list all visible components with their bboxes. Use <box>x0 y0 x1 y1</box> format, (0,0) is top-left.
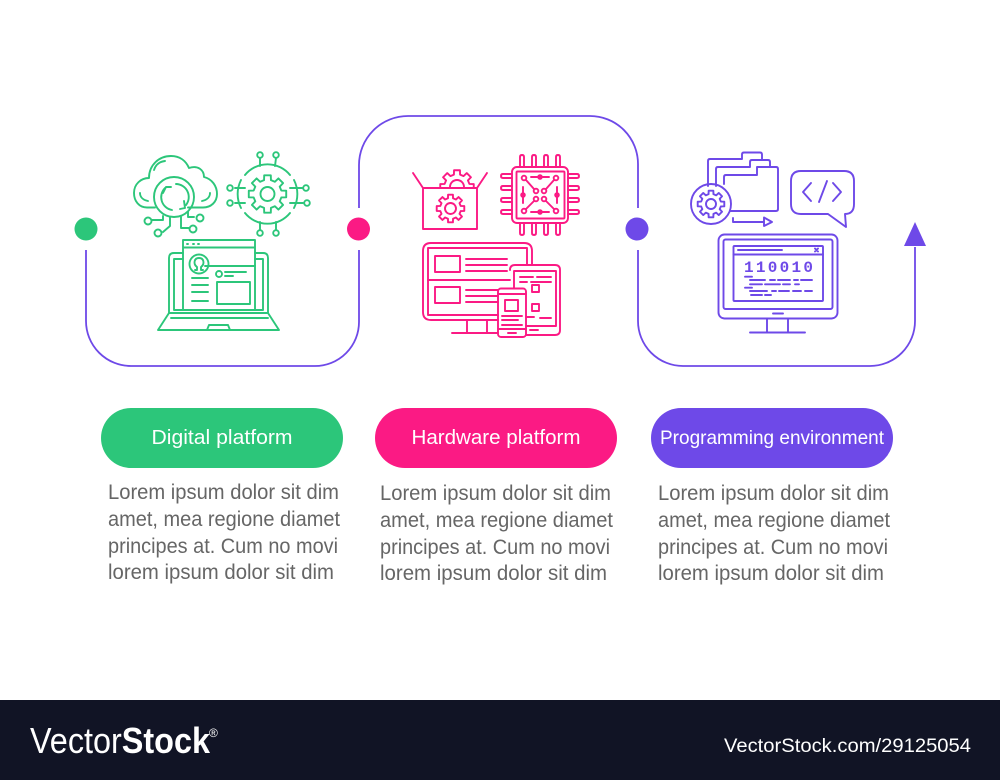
registered mark: ® <box>209 726 218 740</box>
text block: programming environment description: Lorem ipsum dolor sit dim <box>658 482 889 505</box>
text block: hardware platform description: principes at. Cum no movi <box>380 536 610 559</box>
text block: hardware platform description: Lorem ipsum dolor sit dim <box>380 482 611 505</box>
icon: folders with gear <box>691 152 778 226</box>
text block: digital platform description: Lorem ipsum dolor sit dim <box>108 481 339 504</box>
text block: hardware platform description: lorem ipsum dolor sit dim <box>380 562 607 585</box>
icon: cloud sync <box>134 156 217 236</box>
text block: digital platform description: amet, mea regione diamet <box>108 508 340 531</box>
timeline dot: green <box>74 218 98 240</box>
icon: gear circuit <box>227 152 310 236</box>
footer logo: VectorStock <box>30 720 211 761</box>
footer image id: VectorStock.com/29125054 <box>724 736 971 757</box>
timeline connector line <box>86 116 915 366</box>
label pill: programming environment <box>651 408 893 468</box>
text block: hardware platform description <box>380 482 613 585</box>
text block: programming environment description: amet, mea regione diamet <box>658 509 890 532</box>
text block: programming environment description: lorem ipsum dolor sit dim <box>658 562 884 585</box>
text block: digital platform description <box>108 481 340 584</box>
icon: microchip <box>501 155 579 235</box>
label pill: hardware platform <box>375 408 617 468</box>
text block: programming environment description: principes at. Cum no movi <box>658 536 888 559</box>
text block: digital platform description: principes at. Cum no movi <box>108 535 338 558</box>
text block: hardware platform description: amet, mea regione diamet <box>380 509 613 532</box>
icon: hardware platform <box>413 155 579 337</box>
icon: code speech bubble <box>791 171 854 227</box>
text block: digital platform description: lorem ipsum dolor sit dim <box>108 561 334 584</box>
icon: digital platform <box>134 152 310 330</box>
icon: desktop with binary code <box>718 234 838 332</box>
timeline dot: purple <box>626 218 648 240</box>
icon: desktop with binary code: 110010 <box>744 259 813 277</box>
icon: box with gears <box>413 170 487 229</box>
timeline dot: pink <box>347 218 370 240</box>
label pill: digital platform <box>101 408 343 468</box>
label pill: hardware platform: Hardware platform <box>412 426 580 449</box>
icon: laptop with profile window <box>158 240 279 330</box>
footer bar <box>0 700 1000 780</box>
text block: programming environment description <box>658 482 890 585</box>
icon: programming environment <box>691 152 854 332</box>
label pill: digital platform: Digital platform <box>152 426 292 449</box>
label pill: programming environment: Programming environment <box>660 427 885 449</box>
icon: monitor, tablet and phone <box>423 243 560 337</box>
arrow head <box>904 222 926 246</box>
